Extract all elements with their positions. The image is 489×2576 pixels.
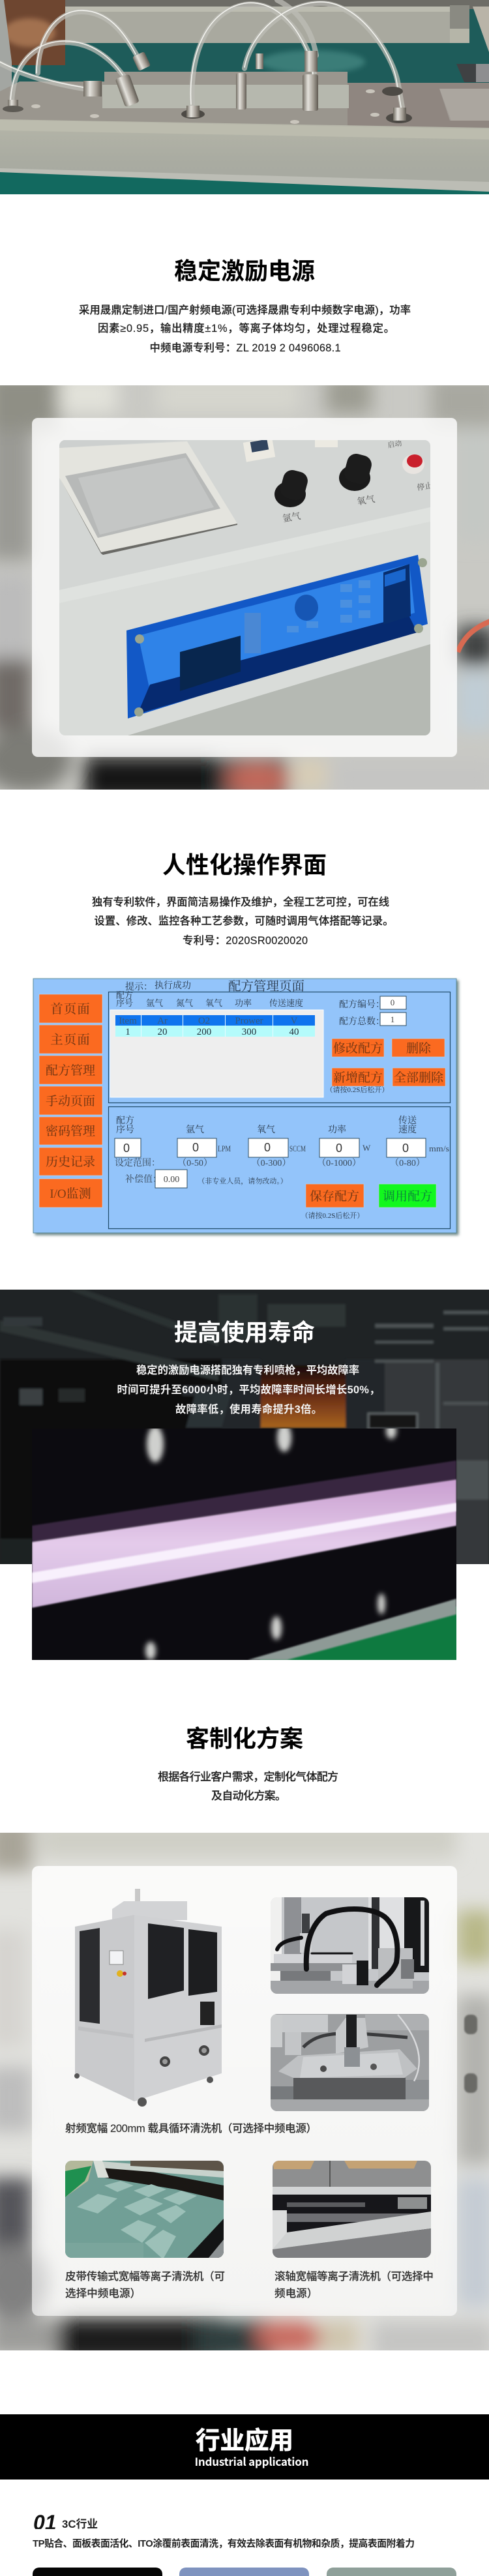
thumbnail: plate head	[271, 2014, 429, 2111]
HMI status and page title: 执行成功	[155, 980, 191, 991]
knobs	[274, 481, 306, 507]
HMI lower panel: recipe inputs	[108, 1107, 450, 1228]
HMI lower panel: recipe inputs: 传送	[398, 1116, 417, 1126]
HMI upper panel: recipe table: Item	[119, 1016, 137, 1026]
HMI lower panel: recipe inputs: （0-50）	[177, 1158, 213, 1168]
HMI lower panel: recipe inputs: 补偿值：	[125, 1174, 162, 1185]
HMI left navigation buttons: 历史记录	[46, 1155, 95, 1169]
HMI lower panel: recipe inputs: SCCM	[289, 1144, 306, 1153]
HMI upper panel: recipe table: 删除	[406, 1041, 432, 1056]
photo: plasma glow	[32, 1423, 456, 1660]
HMI lower panel: recipe inputs: 设定范围：	[115, 1157, 160, 1168]
item heading: 01 3C行业	[34, 2515, 98, 2529]
HMI upper panel: recipe table: 配方	[116, 990, 133, 1000]
captions: belt and roller machine: 选择中频电源）	[65, 2287, 141, 2300]
HMI lower panel: recipe inputs: 0	[123, 1142, 130, 1155]
thumbnail: cable head	[271, 1897, 429, 1994]
HMI upper panel: recipe table: Ar	[157, 1016, 168, 1026]
HMI upper panel: recipe table: Prower	[235, 1016, 263, 1026]
translucent card	[32, 418, 457, 757]
HMI lower panel: recipe inputs: 调用配方	[383, 1189, 432, 1204]
thumbnail: belt cleaner	[65, 2161, 224, 2259]
HMI lower panel: recipe inputs: （0-1000）	[317, 1158, 361, 1168]
HMI status and page title: 配方管理页面	[228, 979, 304, 994]
panel: recipe management HMI screen	[33, 979, 456, 1233]
machine panel photo: 氩气	[282, 511, 301, 524]
text: software description: 专利号：2020SR0020020	[183, 935, 308, 947]
HMI upper panel: recipe table: 新增配方	[333, 1071, 383, 1085]
item heading: 01 3C行业: 01	[33, 2511, 57, 2534]
HMI upper panel: recipe table: 0	[391, 998, 394, 1007]
item heading: 01 3C行业: 3C行业	[62, 2518, 98, 2530]
small indicator	[243, 437, 275, 462]
captions: belt and roller machine: 滚轴宽幅等离子清洗机（可选择中	[274, 2270, 434, 2283]
banner: industrial application	[0, 2414, 489, 2480]
text: software description: 独有专利软件，界面简洁易操作及维护，全程工艺可控，可在线	[92, 896, 389, 908]
heading: 行业应用: 行业应用	[196, 2427, 293, 2454]
HMI upper panel: recipe table: 200	[197, 1027, 211, 1037]
HMI lower panel: recipe inputs: 0	[192, 1141, 199, 1154]
hero photo: gas tubes on plate	[0, 0, 489, 194]
text: customised scheme description	[158, 1770, 338, 1802]
thumbnails: application photos	[33, 2568, 456, 2576]
HMI left navigation buttons: 主页面	[50, 1033, 91, 1047]
HMI status and page title	[125, 979, 304, 994]
HMI upper panel: recipe table: 配方编号：	[339, 999, 385, 1010]
HMI lower panel: recipe inputs: 0	[264, 1141, 271, 1154]
caption: RF wide machine: 射频宽幅 200mm 载具循环清洗机（可选择中频电源）	[65, 2122, 317, 2135]
text: power supply description: 采用晟鼎定制进口/国产射频电源(可选择晟鼎专利中频数字电源)，功率	[79, 304, 411, 316]
HMI upper panel: recipe table: 修改配方	[333, 1041, 383, 1056]
HMI lower panel: recipe inputs: 氩气	[186, 1125, 204, 1135]
panel: control panel photo on blurred background	[0, 372, 489, 802]
HMI upper panel: recipe table: 300	[242, 1027, 256, 1037]
thumbnail: roller cleaner	[273, 2161, 431, 2258]
text: 3C application description: TP贴合、面板表面活化、ITO涂覆前表面清洗，有效去除表面有机物和杂质，提高表面附着力	[33, 2538, 415, 2549]
text: lifespan description: 稳定的激励电源搭配独有专利喷枪，平均故障率	[136, 1364, 359, 1376]
machine panel photo: 启动	[387, 438, 402, 450]
HMI upper panel: recipe table: V	[291, 1016, 298, 1026]
fittings	[3, 51, 412, 124]
text: power supply description: 因素≥0.95，输出精度±1%，等离子体均匀，处理过程稳定。	[98, 322, 394, 334]
HMI upper panel: recipe table: O2	[198, 1016, 210, 1026]
HMI left navigation buttons: 手动页面	[46, 1094, 95, 1108]
HMI upper panel: recipe table: 氮气	[176, 998, 193, 1008]
HMI upper panel: recipe table	[108, 990, 450, 1103]
HMI lower panel: recipe inputs: 0.00	[164, 1175, 179, 1185]
captions: belt and roller machine: 频电源）	[274, 2287, 318, 2300]
heading: 稳定激励电源: 稳定激励电源	[174, 258, 315, 284]
machine panel photo: 停止	[416, 480, 433, 492]
HMI lower panel: recipe inputs: （0-80）	[390, 1158, 425, 1168]
machine panel photo	[59, 437, 433, 735]
blurred workshop background	[0, 372, 489, 802]
HMI left navigation buttons: I/O监测	[50, 1187, 91, 1201]
HMI upper panel: recipe table: 1	[391, 1014, 394, 1024]
HMI lower panel: recipe inputs: 氧气	[257, 1125, 275, 1135]
captions: belt and roller machine	[65, 2270, 434, 2300]
HMI upper panel: recipe table: 配方总数：	[339, 1016, 385, 1027]
text: lifespan description	[117, 1364, 379, 1415]
text: software description	[92, 896, 394, 947]
HMI lower panel: recipe inputs: 功率	[328, 1125, 346, 1135]
machine illustration	[74, 1889, 222, 2107]
HMI background	[33, 979, 456, 1233]
text: lifespan description: 时间可提升至6000小时，平均故障率时间长增长50%，	[117, 1384, 379, 1396]
HMI upper panel: recipe table: 20	[158, 1027, 167, 1037]
HMI lower panel: recipe inputs: （0-300）	[252, 1158, 291, 1168]
panel: customised machines	[0, 1819, 489, 2363]
HMI upper panel: recipe table: 氧气	[205, 998, 222, 1008]
HMI upper panel: recipe table: 全部删除	[394, 1071, 444, 1085]
blue power supply	[126, 555, 428, 718]
captions: belt and roller machine: 皮带传输式宽幅等离子清洗机（可	[65, 2270, 225, 2283]
HMI upper panel: recipe table: （请按0.2S后松开）	[326, 1085, 389, 1094]
HMI lower panel: recipe inputs: mm/s	[429, 1144, 449, 1153]
HMI upper panel: recipe table: 序号	[116, 998, 133, 1008]
HMI lower panel: recipe inputs: W	[363, 1143, 371, 1153]
HMI left navigation buttons: 密码管理	[46, 1124, 95, 1138]
HMI lower panel: recipe inputs: 序号	[116, 1125, 134, 1135]
dark factory background	[0, 1290, 489, 1568]
text: customised scheme description: 及自动化方案。	[211, 1789, 286, 1802]
text: lifespan description: 故障率低，使用寿命提升3倍。	[175, 1403, 322, 1415]
tubes	[0, 0, 403, 111]
text: power supply description: 中频电源专利号：ZL 2019 2 0496068.1	[150, 342, 340, 354]
HMI lower panel: recipe inputs: 0	[402, 1142, 409, 1155]
HMI lower panel: recipe inputs: 0	[336, 1142, 342, 1155]
HMI upper panel: recipe table: 功率	[235, 998, 252, 1008]
heading: 客制化方案: 客制化方案	[186, 1725, 303, 1752]
HMI upper panel: recipe table: 传送速度	[269, 998, 303, 1008]
HMI left navigation buttons: 首页面	[50, 1002, 91, 1016]
heading: 提高使用寿命: 提高使用寿命	[174, 1319, 315, 1346]
HMI lower panel: recipe inputs: 配方	[116, 1116, 134, 1126]
HMI lower panel: recipe inputs: （非专业人员，请勿改动。）	[198, 1176, 288, 1185]
touch screen	[59, 441, 237, 554]
HMI status and page title: 提示：	[125, 981, 153, 992]
HMI upper panel: recipe table: 1	[125, 1027, 130, 1037]
subheading: English: Industrial application	[194, 2453, 309, 2469]
HMI lower panel: recipe inputs: （请按0.2S后松开）	[301, 1211, 364, 1220]
text: customised scheme description: 根据各行业客户需求，定制化气体配方	[158, 1770, 338, 1783]
HMI upper panel: recipe table: 氩气	[146, 998, 163, 1008]
HMI left navigation buttons: 配方管理	[46, 1063, 95, 1078]
HMI lower panel: recipe inputs: 速度	[398, 1124, 417, 1135]
red button	[402, 454, 424, 474]
text: power supply description	[79, 304, 411, 354]
panel: dark section	[0, 1290, 489, 1660]
text: software description: 设置、修改、监控各种工艺参数，可随时调用气体搭配等记录。	[94, 915, 394, 927]
HMI lower panel: recipe inputs: LPM	[218, 1144, 231, 1153]
HMI lower panel: recipe inputs: 保存配方	[310, 1189, 359, 1204]
HMI upper panel: recipe table: 40	[289, 1027, 299, 1037]
heading: 人性化操作界面: 人性化操作界面	[162, 851, 327, 878]
translucent card	[32, 1866, 457, 2316]
HMI left navigation buttons	[39, 994, 102, 1207]
machine panel photo: 氧气	[356, 494, 376, 507]
blurred background	[0, 1819, 489, 2363]
